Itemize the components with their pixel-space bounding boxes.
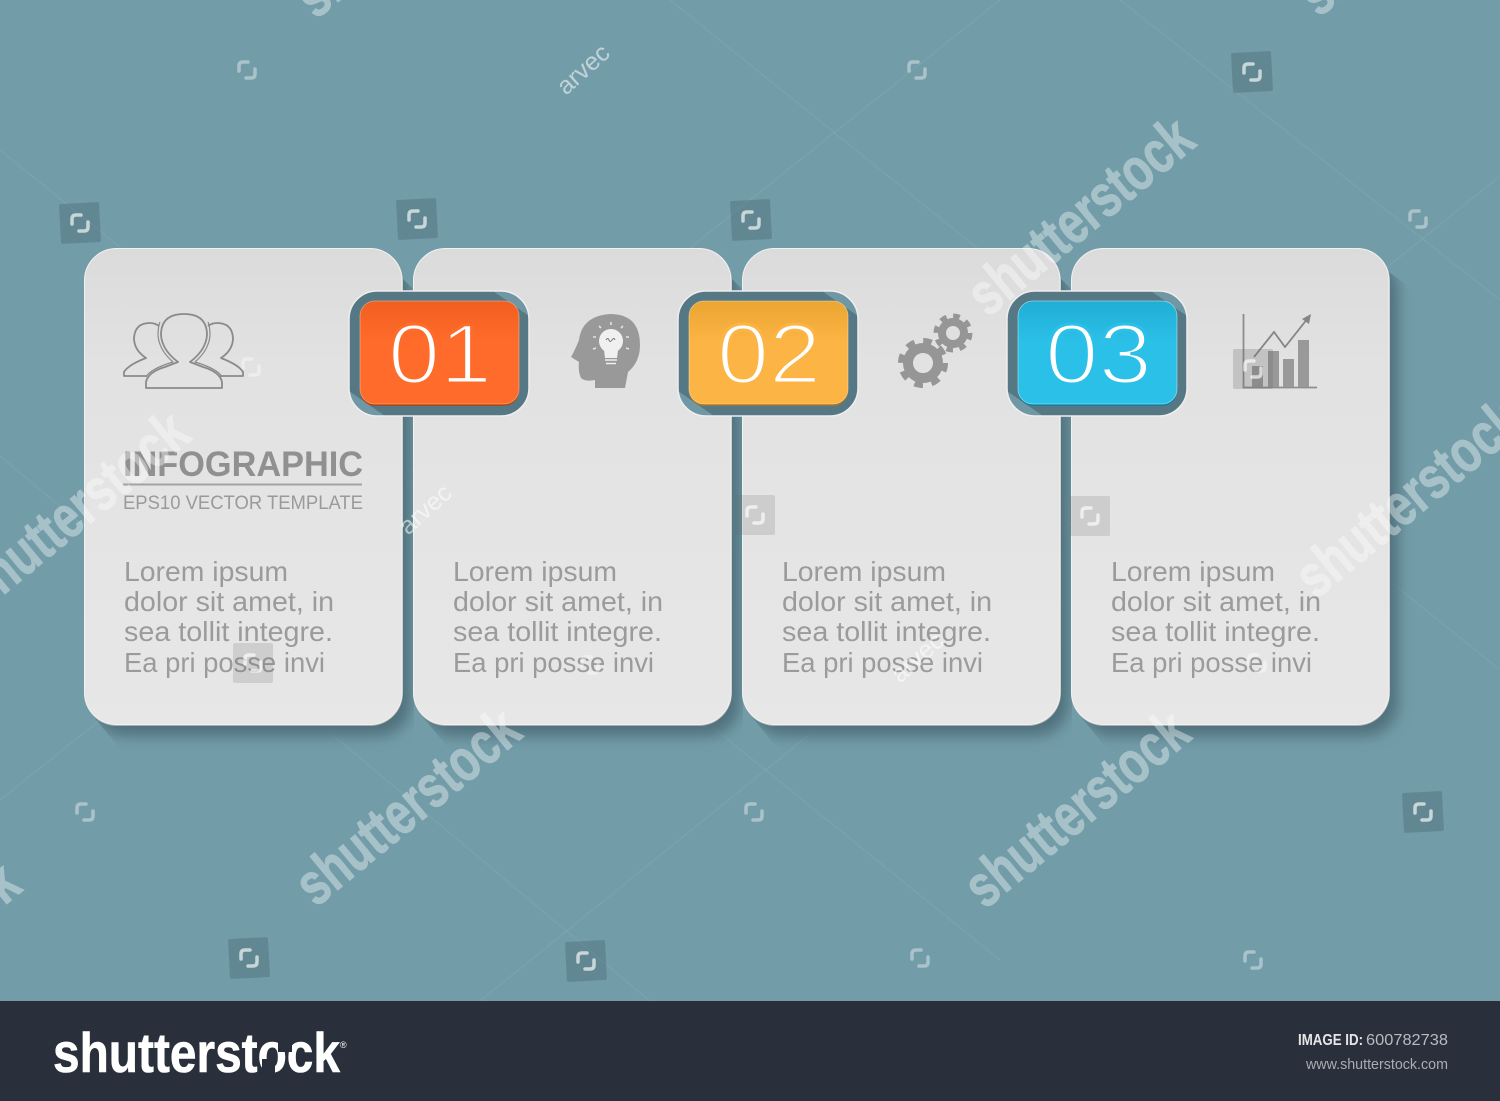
watermark: tiled logo marks xyxy=(59,51,1444,982)
text block: card 3: sea tollit integre. xyxy=(782,616,991,647)
icon: people xyxy=(124,314,243,388)
footer bar xyxy=(0,1001,1500,1101)
footer logo: ® xyxy=(340,1040,347,1050)
badge: 02: 02 xyxy=(717,307,821,401)
badge: 03 xyxy=(1007,291,1187,416)
text block: card 3: dolor sit amet, in xyxy=(782,586,992,617)
panel: card 1 xyxy=(84,248,403,726)
panel: card 2 xyxy=(413,248,732,726)
watermark: diagonal wordmarks: shutterstock xyxy=(282,694,533,918)
text block: card 2: Ea pri posse invi xyxy=(453,647,654,678)
badge: 03: 03 xyxy=(1045,307,1152,401)
badge: 01: 01 xyxy=(388,307,492,401)
watermark: diagonal wordmarks: shutterstock xyxy=(954,103,1207,328)
text block: card 2: sea tollit integre. xyxy=(453,616,662,647)
watermark: corner marks xyxy=(72,62,1431,969)
text block: card 2: Lorem ipsum xyxy=(453,556,617,587)
watermark: diagonal wordmarks: shutterstock xyxy=(951,696,1202,920)
badge: 01 xyxy=(349,291,529,416)
text block: card 3: Ea pri posse invi xyxy=(782,647,983,678)
icon: head with light bulb xyxy=(571,314,640,388)
icon: gears xyxy=(902,316,970,384)
website: www.shutterstock.com xyxy=(1305,1057,1448,1073)
badge: 02 xyxy=(678,291,858,416)
text block: card 1: Ea pri posse invi xyxy=(124,647,325,678)
text block: card 1: dolor sit amet, in xyxy=(124,586,334,617)
watermark: diagonal wordmarks: arvec xyxy=(393,479,457,540)
text block: card 4: Lorem ipsum xyxy=(1111,556,1275,587)
text block: card 2: dolor sit amet, in xyxy=(453,586,663,617)
card shadows xyxy=(92,258,1398,736)
panel: card 4 xyxy=(1071,248,1390,726)
panel: card 3 xyxy=(742,248,1061,726)
text block: card 1: sea tollit integre. xyxy=(124,616,333,647)
heading: infographic: INFOGRAPHIC xyxy=(123,445,363,484)
text block: card 4: dolor sit amet, in xyxy=(1111,586,1321,617)
subheading: template: EPS10 VECTOR TEMPLATE xyxy=(123,493,363,514)
icon: bar chart with arrow xyxy=(1244,314,1317,388)
watermark: diagonal wordmarks: arvec xyxy=(551,39,615,100)
image id: 600782738 xyxy=(1366,1032,1448,1049)
watermark: diagonal wordmarks: arvec xyxy=(885,627,949,688)
text block: card 4: Ea pri posse invi xyxy=(1111,647,1312,678)
footer logo: shutterstock xyxy=(53,1021,341,1084)
text block: card 3: Lorem ipsum xyxy=(782,556,946,587)
image id: IMAGE ID: xyxy=(1298,1032,1363,1049)
text block: card 1: Lorem ipsum xyxy=(124,556,288,587)
text block: card 4: sea tollit integre. xyxy=(1111,616,1320,647)
